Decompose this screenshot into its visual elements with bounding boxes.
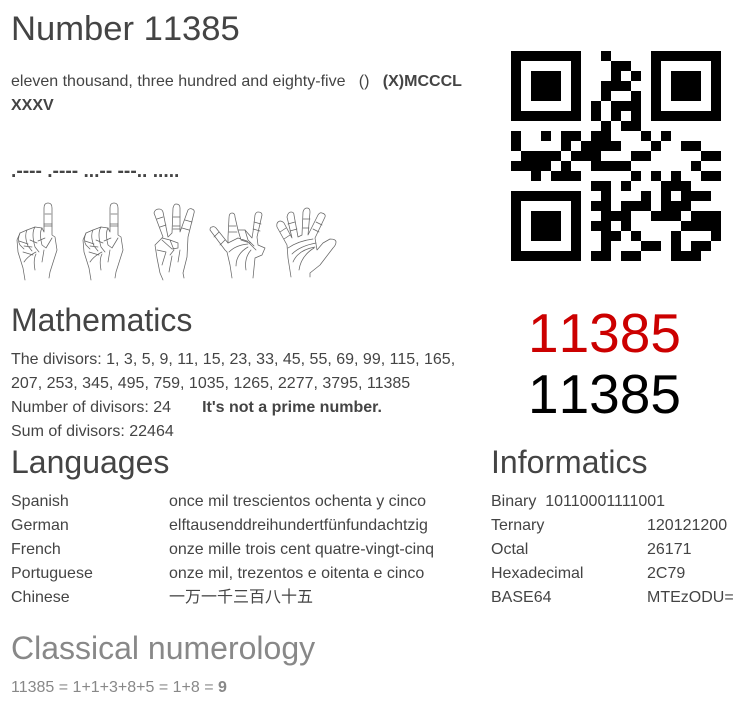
- number in black: 11385: [528, 363, 681, 425]
- table: informatics: Binary 10110001111001: [491, 493, 665, 510]
- icon: hand showing 1: [17, 203, 57, 280]
- text block: divisors: Number of divisors: 24 It's not a prime number.: [11, 399, 382, 416]
- number in red: 11385: [528, 302, 681, 364]
- number name and roman numeral: [11, 73, 462, 114]
- table: languages: 一万一千三百八十五: [169, 589, 313, 606]
- table: informatics: [491, 493, 734, 606]
- text block: divisors: [11, 351, 455, 440]
- table: informatics: BASE64: [491, 589, 551, 606]
- heading: Informatics: Informatics: [491, 444, 647, 480]
- icon: hand showing 1: [83, 203, 123, 280]
- title: Number 11385: [11, 10, 240, 48]
- number name and roman numeral: eleven thousand, three hundred and eighty-five () (X)MCCCL: [11, 73, 462, 90]
- table: languages: onze mille trois cent quatre-vingt-cinq: [169, 541, 434, 558]
- table: informatics: 120121200: [647, 517, 727, 534]
- table: languages: [11, 493, 434, 606]
- table: languages: once mil trescientos ochenta y cinco: [169, 493, 426, 510]
- table: informatics: Octal: [491, 541, 528, 558]
- numerology calculation: 11385 = 1+1+3+8+5 = 1+8 = 9: [11, 679, 227, 696]
- table: languages: Chinese: [11, 589, 70, 606]
- text block: divisors: Sum of divisors: 22464: [11, 423, 174, 440]
- table: languages: Spanish: [11, 493, 69, 510]
- icon: hands counting 1 1 3 8 5: [16, 202, 336, 280]
- table: languages: onze mil, trezentos e oitenta e cinco: [169, 565, 424, 582]
- table: languages: German: [11, 517, 69, 534]
- table: informatics: Hexadecimal: [491, 565, 583, 582]
- heading: Mathematics: Mathematics: [11, 302, 192, 338]
- heading: Languages: Languages: [11, 444, 169, 480]
- table: informatics: MTEzODU=: [647, 589, 734, 606]
- number name and roman numeral: XXXV: [11, 97, 54, 114]
- table: languages: elftausenddreihundertfünfundachtzig: [169, 517, 428, 534]
- morse code: .---- .---- ...-- ---.. .....: [11, 161, 179, 182]
- icon: QR code: [511, 51, 721, 261]
- icon: hand showing 3: [154, 204, 194, 280]
- text block: divisors: The divisors: 1, 3, 5, 9, 11, 15, 23, 33, 45, 55, 69, 99, 115, 165,: [11, 351, 455, 368]
- table: informatics: 2C79: [647, 565, 685, 582]
- icon: hand showing 8: [210, 212, 265, 278]
- icon: hand showing 5: [277, 208, 336, 277]
- text block: divisors: 207, 253, 345, 495, 759, 1035, 1265, 2277, 3795, 11385: [11, 375, 410, 392]
- table: informatics: Ternary: [491, 517, 544, 534]
- table: informatics: 26171: [647, 541, 692, 558]
- heading: Classical numerology: Classical numerology: [11, 630, 315, 666]
- table: languages: French: [11, 541, 61, 558]
- table: languages: Portuguese: [11, 565, 93, 582]
